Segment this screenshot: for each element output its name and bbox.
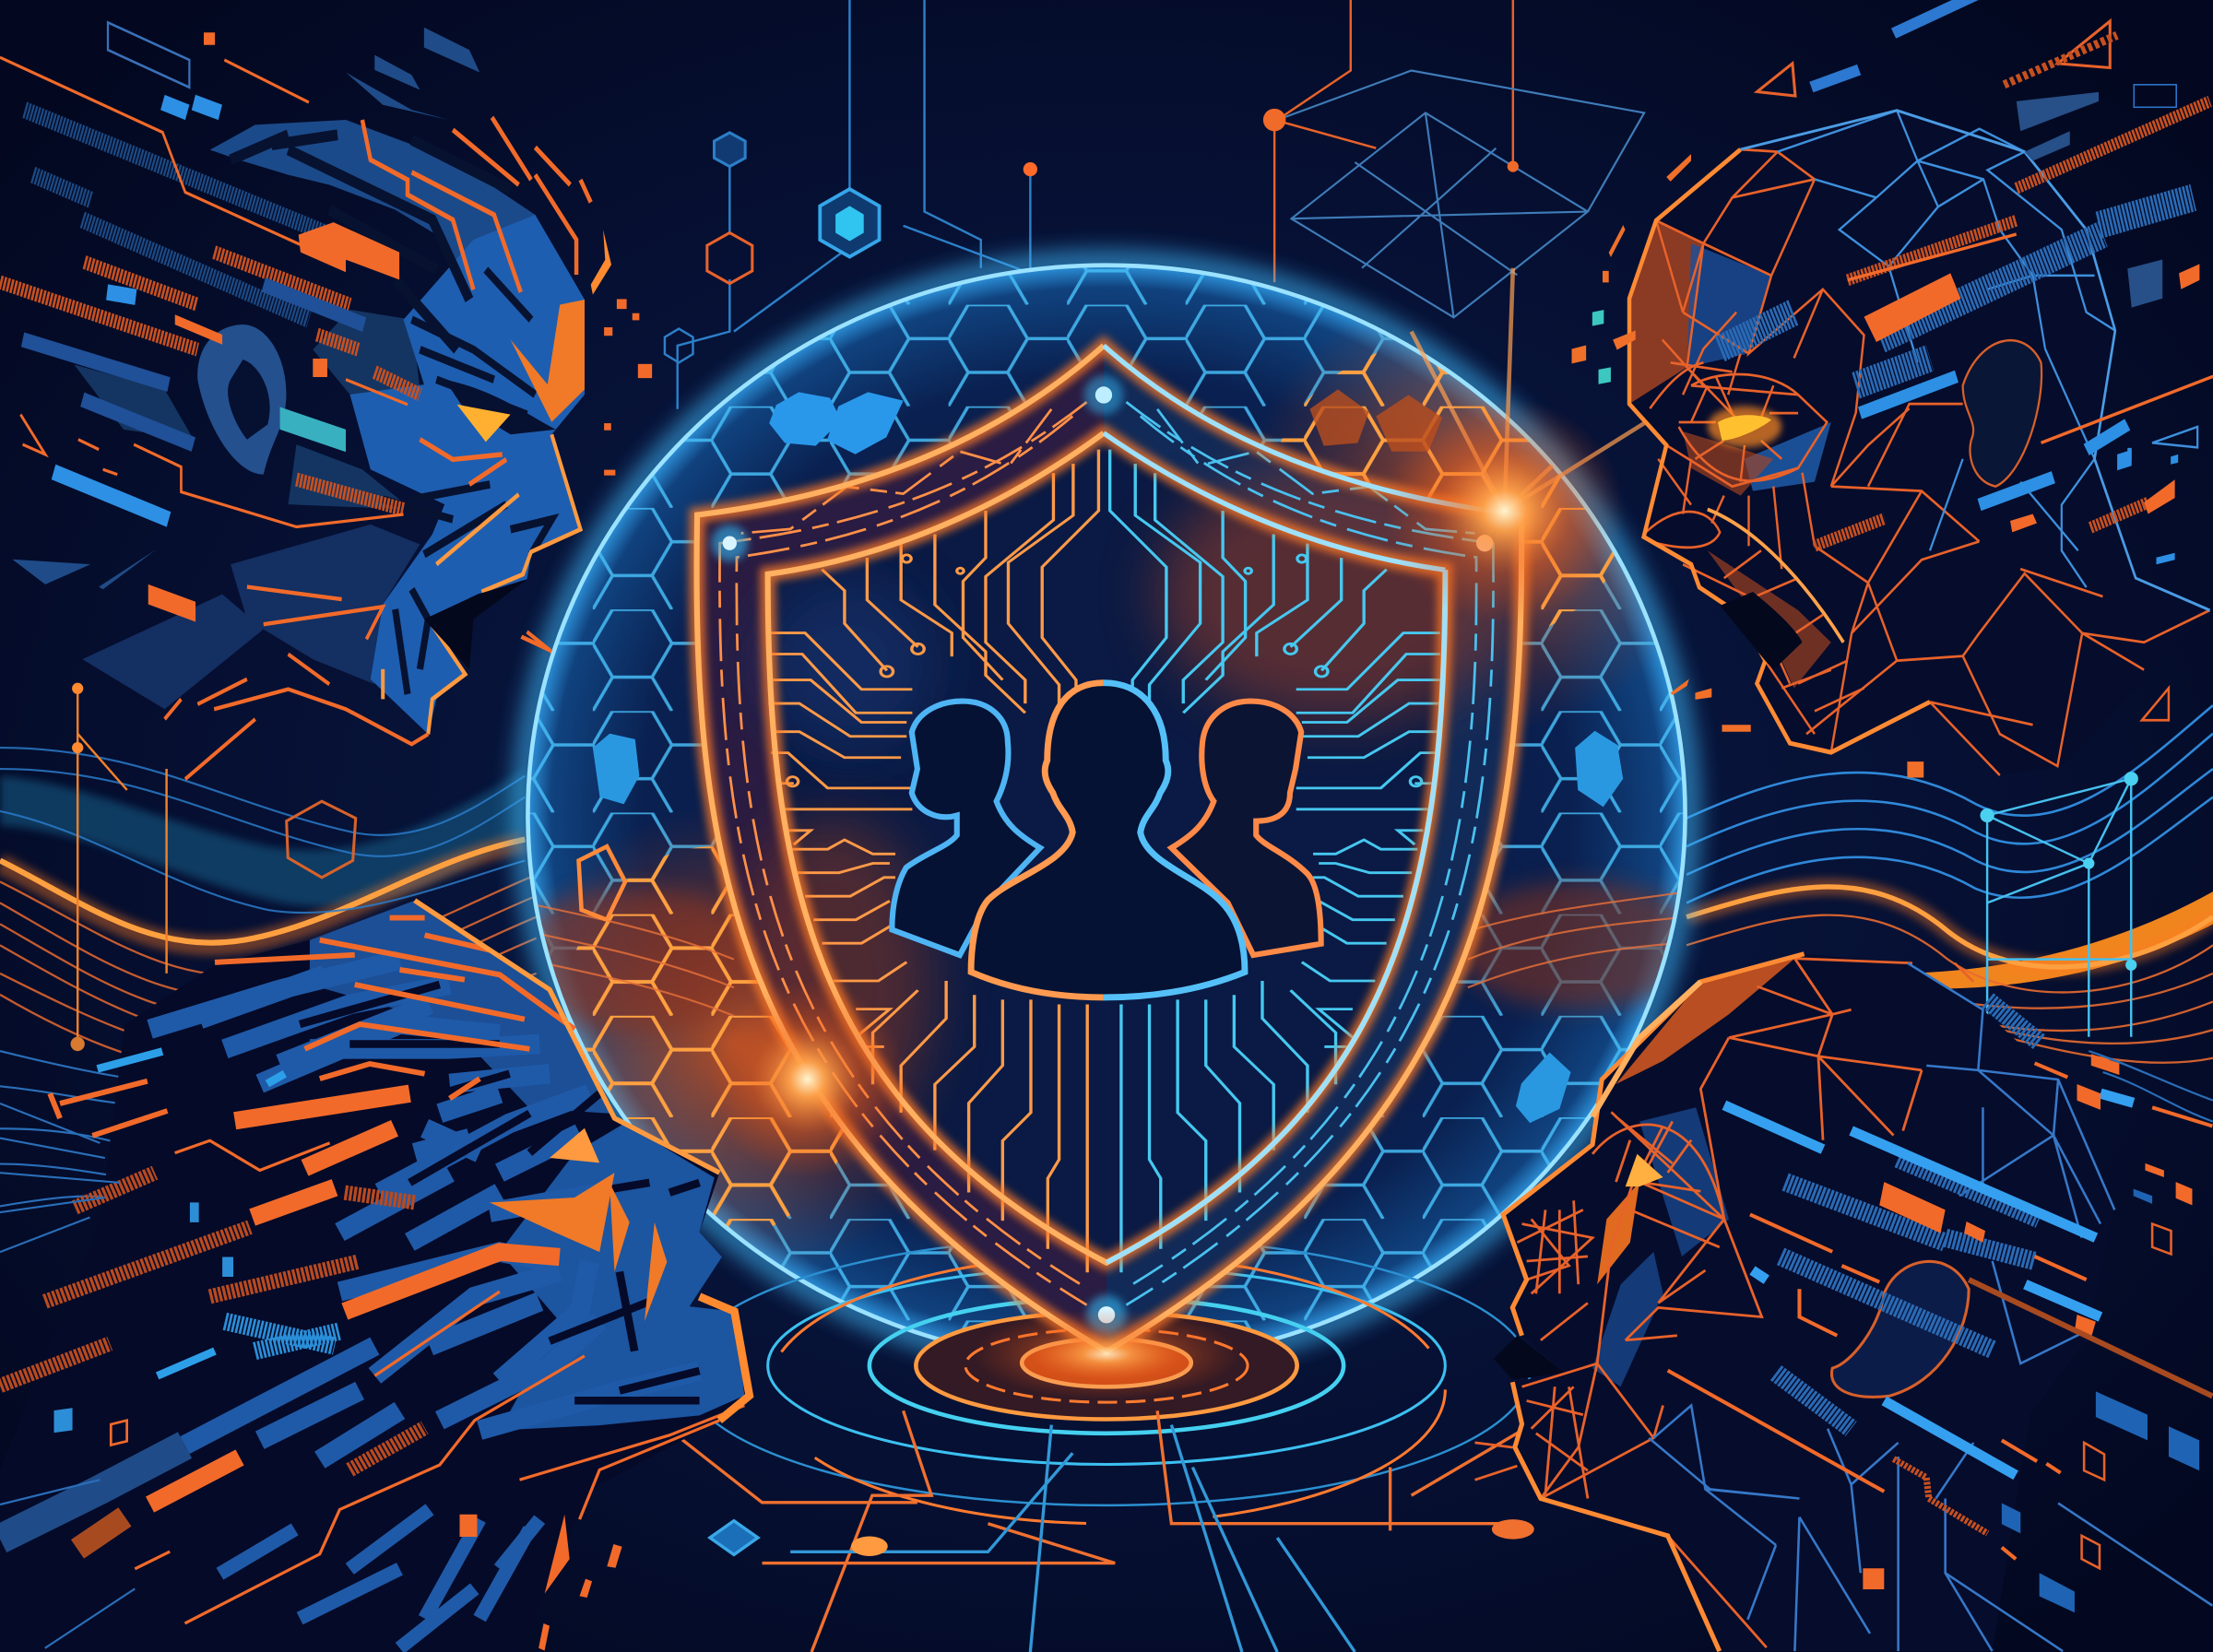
floating slabs: [12, 28, 479, 589]
hexagon sphere: [494, 254, 1722, 1368]
jaw line: [1708, 510, 1843, 643]
blue mesh: [1649, 963, 2212, 1651]
head dark base: [1629, 111, 2210, 775]
dotted blue bands: [1776, 1000, 2040, 1429]
outline box: [108, 22, 189, 88]
teal glitch bar: [280, 407, 346, 452]
warm side glows: [734, 466, 1524, 1157]
face dark strokes: [383, 270, 551, 694]
dark base: [0, 901, 750, 1652]
face front: [350, 215, 585, 734]
orange glow patches: [537, 325, 1678, 1267]
solid blue bars: [23, 285, 364, 444]
left person: [892, 702, 1040, 955]
outlined squares: [2082, 1224, 2172, 1568]
centre person: [971, 683, 1245, 997]
inner wave lines: [525, 891, 1688, 1016]
shield body: [697, 346, 1521, 1351]
glowing hex cells: [579, 389, 1623, 1123]
dark face strokes: [300, 985, 700, 1400]
cheek and profile lines: [383, 434, 581, 734]
bright blue bars: [1860, 376, 2132, 505]
bright blue bars: [53, 102, 220, 519]
open mouth: [1494, 1336, 1564, 1380]
orange head lines: [362, 117, 591, 484]
small shapes: [2117, 450, 2178, 564]
shield band left: [697, 346, 1106, 1351]
blue mesh: [1778, 111, 2115, 587]
eye: [550, 1128, 599, 1162]
open mouth: [424, 579, 527, 669]
bright blue marks: [98, 1052, 285, 1375]
orange hair lines: [50, 918, 574, 1136]
blue chips: [2002, 1189, 2199, 1612]
orange face outline: [1503, 954, 1805, 1651]
dotted orange bands: [0, 253, 420, 510]
centre outline warm: [971, 683, 1104, 997]
orange blocks: [148, 32, 399, 621]
shield nodes: [711, 375, 1493, 1335]
face: top left: [0, 22, 611, 779]
top right data shapes: [1809, 0, 2176, 107]
orange bars: [150, 1093, 560, 1504]
dotted blue patch: [225, 1321, 339, 1351]
shield blue top edges: [1104, 346, 1521, 1263]
upper hair fill: [310, 901, 609, 1114]
temple cool fill: [1687, 243, 1771, 367]
dotted blue bands: [1720, 197, 2194, 385]
cheek warm fill: [1683, 431, 1831, 688]
orange face highlights: [511, 300, 585, 422]
head dark strokes: [231, 135, 511, 349]
ear: [1831, 1261, 1969, 1397]
orange mesh: [1474, 959, 1973, 1647]
shield outer glow: [697, 346, 1521, 1351]
orange mesh: [1646, 149, 2210, 775]
shield: [697, 346, 1524, 1351]
triangle outline: [2152, 427, 2197, 447]
wave bands: [0, 705, 2213, 1206]
dim blocks: [2017, 92, 2162, 308]
face: top right: [1572, 92, 2213, 777]
thin blue lines: [0, 1103, 135, 1648]
hex mesh: [522, 254, 1694, 1368]
orange face outline: [1629, 149, 1930, 752]
bright band over forehead: [1592, 982, 1700, 1116]
lips: [700, 1296, 750, 1421]
forehead warm fill: [1629, 220, 1703, 404]
shield interior traces left: [768, 450, 1098, 1272]
orange block: [1863, 1054, 2192, 1589]
ear inner: [228, 360, 270, 440]
cyan chips: [1592, 310, 1611, 384]
eye: [457, 405, 511, 442]
blue head outline: [1741, 111, 2210, 610]
blue strokes: [150, 960, 700, 1460]
data poles: left: [71, 683, 356, 1051]
eye: [1626, 1154, 1663, 1186]
cheek cool fill: [1592, 1107, 1729, 1386]
brown long bar: [1969, 1280, 2212, 1396]
dotted orange bands: [0, 1173, 425, 1469]
floor circuit lines: [663, 1410, 1534, 1652]
band circuitry: [719, 402, 1494, 1305]
cheek cool fill: [1745, 422, 1831, 491]
network nodes: [665, 109, 1519, 362]
dotted orange text-like mark: [1894, 1459, 1988, 1533]
orange bars: [1864, 264, 2199, 532]
centre outline cool: [1104, 683, 1245, 997]
orange flake: [591, 230, 611, 295]
mid head fragments: [74, 310, 420, 510]
flakes: top left: [520, 299, 652, 652]
sphere glow: [525, 263, 1688, 1365]
right person: [1171, 702, 1321, 955]
upper head bands: [210, 120, 548, 289]
eye glow: [1708, 407, 1781, 447]
network lines at top: [678, 0, 2110, 409]
orange thin lines: [135, 1140, 744, 1623]
eye: [1718, 415, 1771, 441]
ear: [1963, 340, 2041, 487]
platform rings: [683, 1237, 1530, 1524]
dotted data bands: [25, 110, 329, 320]
orange face fill: [490, 1173, 667, 1321]
brown bar: [77, 1516, 124, 1549]
head dark base: [1503, 954, 2114, 1651]
lower streaks: [219, 1509, 539, 1648]
bright blue bars: [1724, 1093, 2134, 1475]
face front: [500, 1123, 744, 1430]
dotted orange bands: [1815, 101, 2210, 546]
shield band right: [1104, 346, 1521, 1351]
cheek warm fill: [1597, 1182, 1639, 1284]
orange thin bars: [1668, 1063, 2212, 1559]
cyan squares: [54, 1202, 233, 1433]
jaw and neck fragments: [82, 525, 420, 709]
open mouth: [1720, 592, 1803, 670]
ear: [197, 324, 286, 475]
dark brow: [444, 380, 556, 434]
orange chips: [459, 1515, 622, 1650]
shield outlines: [697, 346, 1521, 1351]
neck lines: [165, 587, 551, 779]
forehead warm fill: [1616, 959, 1794, 1084]
orange line: [1848, 234, 2213, 442]
orange chips: [1572, 154, 1923, 777]
dim lower band: [0, 1446, 184, 1540]
wireframe graph right: [1980, 772, 2138, 1037]
face: bottom left: [0, 901, 750, 1652]
orange circuit lines: [0, 57, 408, 527]
shield interior traces right: [1110, 450, 1440, 1272]
face: bottom right: [1474, 954, 2212, 1651]
glow flares: [708, 268, 1644, 1399]
profile glow line: [415, 901, 719, 1173]
sphere rim: [527, 266, 1686, 1363]
outlined square: [111, 1421, 127, 1446]
people icon: [892, 683, 1321, 997]
